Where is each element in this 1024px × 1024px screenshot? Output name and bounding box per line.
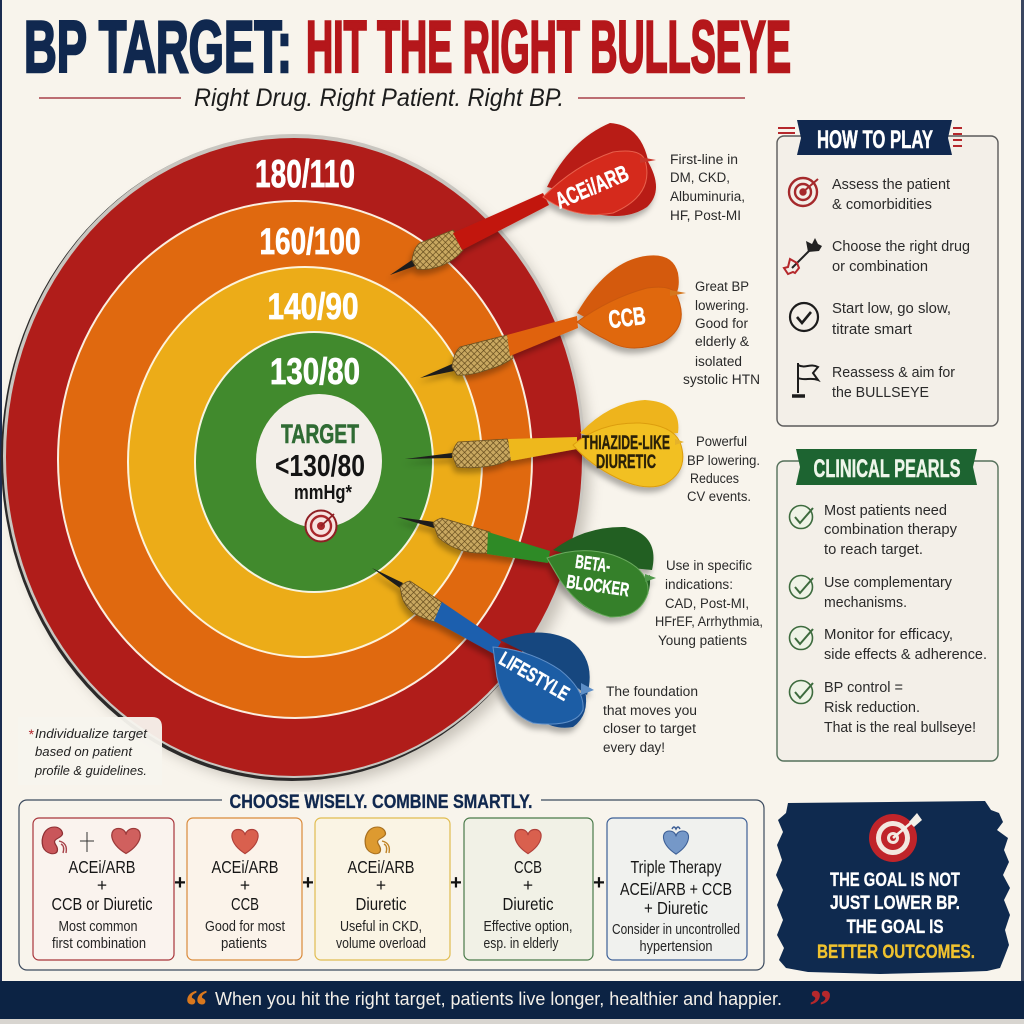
pearl 3: Monitor for efficacy, — [824, 626, 953, 643]
footnote — [18, 717, 162, 785]
text: ACEi/ARB description: HF, Post-MI — [670, 208, 741, 223]
card text: + Diuretic — [644, 898, 708, 918]
icon: check circle — [790, 303, 818, 331]
card text: Consider in uncontrolled — [612, 922, 740, 938]
card: ACEi/ARB + CCB — [187, 818, 302, 960]
label 140/90: 140/90 — [268, 286, 358, 327]
footnote: * — [28, 726, 34, 742]
label 130/80: 130/80 — [270, 351, 360, 392]
icon: kidney — [365, 827, 389, 854]
text: Thiazide description: CV events. — [687, 489, 751, 504]
pearl 3 — [824, 626, 987, 663]
pearl 1: combination therapy — [824, 521, 957, 538]
center bullseye — [256, 394, 382, 528]
heading banner: how to play — [778, 120, 962, 155]
step 4 — [832, 364, 955, 401]
card text: Good for most — [205, 919, 285, 935]
text: CCB description: Great BP — [695, 279, 749, 294]
text: Beta-blocker description: Use in specific — [666, 558, 752, 573]
dart: Beta-blocker: BETA- — [574, 552, 612, 577]
step 4: Reassess & aim for — [832, 364, 955, 381]
icon: kidney — [42, 827, 66, 854]
icon: blue heart — [663, 827, 689, 854]
pearl 3: side effects & adherence. — [824, 646, 987, 663]
ring: 160/100 orange — [58, 201, 532, 718]
card text: + — [97, 875, 107, 895]
card text — [612, 857, 740, 955]
card text: volume overload — [336, 936, 426, 952]
text: Thiazide description — [687, 434, 760, 504]
dart: ACEi/ARB: ACEi/ARB — [551, 160, 632, 214]
text: Beta-blocker description: HFrEF, Arrhythmia, — [655, 614, 763, 629]
text: CCB description: elderly & — [695, 334, 749, 349]
card text: first combination — [52, 936, 146, 952]
pearl 1 — [824, 502, 957, 558]
subtitle: Right Drug. Right Patient. Right BP. — [194, 84, 564, 112]
step 2: or combination — [832, 258, 928, 275]
callout text: BETTER OUTCOMES. — [817, 942, 975, 963]
plus sign: + — [302, 872, 314, 894]
target label: TARGET — [281, 419, 359, 449]
card text — [484, 857, 572, 952]
step 4: the BULLSEYE — [832, 384, 929, 401]
callout: the goal — [776, 801, 1010, 974]
step 2: Choose the right drug — [832, 238, 970, 255]
card text — [205, 857, 285, 952]
text: Lifestyle description — [603, 684, 698, 755]
pearl 4: That is the real bullseye! — [824, 719, 976, 736]
dart: CCB — [420, 255, 686, 378]
target value: <130/80 — [275, 448, 365, 483]
label 180/110: 180/110 — [255, 153, 355, 196]
plus sign: + — [593, 872, 605, 894]
dart: Thiazide-like diuretic: THIAZIDE-LIKE — [582, 433, 670, 454]
card text: CCB — [514, 857, 542, 877]
card text: hypertension — [640, 939, 712, 955]
icon: red target with arrow — [869, 813, 922, 862]
ring: 130/80 green — [195, 332, 433, 592]
text: Thiazide description: BP lowering. — [687, 453, 760, 468]
step 3: titrate smart — [832, 321, 913, 338]
dart: Lifestyle — [372, 568, 594, 728]
target unit: mmHg* — [294, 482, 352, 504]
panel: combinations — [19, 792, 764, 970]
card text: ACEi/ARB — [348, 857, 414, 877]
text: CCB description — [683, 279, 760, 387]
callout text — [817, 870, 975, 963]
plus sign: + — [450, 872, 462, 894]
text: CCB description: Good for — [695, 316, 749, 331]
step 1: Assess the patient — [832, 176, 951, 193]
ring: 180/110 red — [6, 138, 582, 776]
plus sign: + — [174, 872, 186, 894]
dart: Thiazide-like diuretic: DIURETIC — [596, 452, 656, 473]
quote bar — [0, 980, 1024, 1024]
text: CCB description: systolic HTN — [683, 372, 760, 387]
step 1 — [832, 176, 951, 213]
card text: + — [376, 875, 386, 895]
heading: choose wisely: CHOOSE WISELY. COMBINE SMARTLY. — [230, 792, 532, 813]
step 2 — [832, 238, 970, 275]
card text: CCB — [231, 894, 259, 914]
dart: Beta-blocker — [397, 517, 656, 617]
title: BP TARGET: — [24, 7, 292, 88]
quote text: When you hit the right target, patients live longer, healthier and happier. — [215, 989, 782, 1009]
text: Beta-blocker description: Young patients — [658, 633, 747, 648]
card text: esp. in elderly — [484, 936, 559, 952]
text: Lifestyle description: The foundation — [606, 684, 698, 699]
icon: check — [790, 506, 813, 528]
card: ACEi/ARB + CCB or Diuretic — [33, 818, 174, 960]
text: Beta-blocker description — [655, 558, 763, 648]
dart: ACEi/ARB — [390, 123, 656, 275]
text: Beta-blocker description: indications: — [665, 577, 733, 592]
pearl 2: mechanisms. — [824, 594, 907, 611]
step 3: Start low, go slow, — [832, 300, 951, 317]
footnote: Individualize target — [35, 727, 148, 741]
card text — [52, 857, 153, 952]
card text: ACEi/ARB — [68, 857, 136, 877]
icon: check — [790, 680, 813, 704]
text: ACEi/ARB description: Albuminuria, — [670, 189, 745, 204]
text: Lifestyle description: every day! — [603, 740, 665, 755]
callout text: JUST LOWER BP. — [830, 893, 960, 914]
card text: Useful in CKD, — [340, 919, 422, 935]
footnote: based on patient — [35, 745, 133, 759]
card text: Triple Therapy — [630, 857, 722, 877]
card text: Effective option, — [484, 919, 572, 935]
text: Thiazide description: Reduces — [690, 471, 739, 486]
icon: check — [790, 626, 813, 650]
text: Beta-blocker description: CAD, Post-MI, — [665, 596, 749, 611]
panel: clinical pearls — [777, 449, 998, 761]
footnote: profile & guidelines. — [34, 764, 147, 778]
card text: Diuretic — [356, 894, 407, 914]
icon: plus — [80, 832, 94, 852]
icon: dart — [784, 238, 822, 274]
heading banner: how to play: HOW TO PLAY — [817, 126, 933, 154]
pearl 1: to reach target. — [824, 541, 923, 558]
card text: Diuretic — [502, 894, 554, 914]
card: triple therapy — [607, 818, 747, 960]
heading banner: clinical pearls — [796, 449, 977, 485]
text: CCB description: lowering. — [695, 298, 749, 313]
dart: CCB: CCB — [607, 302, 647, 334]
text: Thiazide description: Powerful — [696, 434, 747, 449]
dartboard — [1, 134, 590, 785]
pearl 2 — [824, 574, 952, 611]
callout text: THE GOAL IS NOT — [830, 870, 960, 891]
card text: + — [240, 875, 250, 895]
card text: CCB or Diuretic — [52, 894, 153, 914]
text: ACEi/ARB description: First-line in — [670, 152, 738, 167]
icon: target — [789, 178, 818, 206]
icon: check — [790, 576, 813, 598]
card text — [336, 857, 426, 952]
text: Lifestyle description: closer to target — [603, 721, 696, 736]
pearl 4: BP control = — [824, 679, 903, 696]
card text: + — [523, 875, 533, 895]
label 160/100: 160/100 — [260, 221, 360, 262]
pearl 1: Most patients need — [824, 502, 947, 519]
icon: heart — [232, 830, 258, 854]
dart: Thiazide-like diuretic — [405, 400, 684, 487]
text: Lifestyle description: that moves you — [603, 703, 697, 718]
dart: Beta-blocker: BLOCKER — [565, 572, 631, 601]
card text: Most common — [58, 919, 138, 935]
icon: small target — [306, 510, 336, 542]
text: ACEi/ARB description: DM, CKD, — [670, 170, 730, 185]
card text: ACEi/ARB — [212, 857, 278, 877]
pearl 2: Use complementary — [824, 574, 952, 591]
step 1: & comorbidities — [832, 196, 932, 213]
card: CCB + Diuretic — [464, 818, 593, 960]
step 3 — [832, 300, 951, 338]
text: ACEi/ARB description — [670, 152, 745, 223]
pearl 4 — [824, 679, 976, 736]
icon: heart — [515, 830, 541, 854]
pearl 4: Risk reduction. — [824, 699, 920, 716]
panel: how to play — [777, 120, 998, 426]
card text: ACEi/ARB + CCB — [620, 879, 732, 899]
title — [24, 7, 791, 88]
dart: Lifestyle: LIFESTYLE — [495, 648, 573, 706]
ring: 140/90 yellow — [128, 267, 482, 657]
card: ACEi/ARB + Diuretic — [315, 818, 450, 960]
icon: flag — [792, 363, 818, 396]
icon: heart — [112, 828, 140, 854]
callout text: THE GOAL IS — [846, 917, 944, 938]
card text: patients — [221, 936, 267, 952]
text: CCB description: isolated — [695, 354, 742, 369]
